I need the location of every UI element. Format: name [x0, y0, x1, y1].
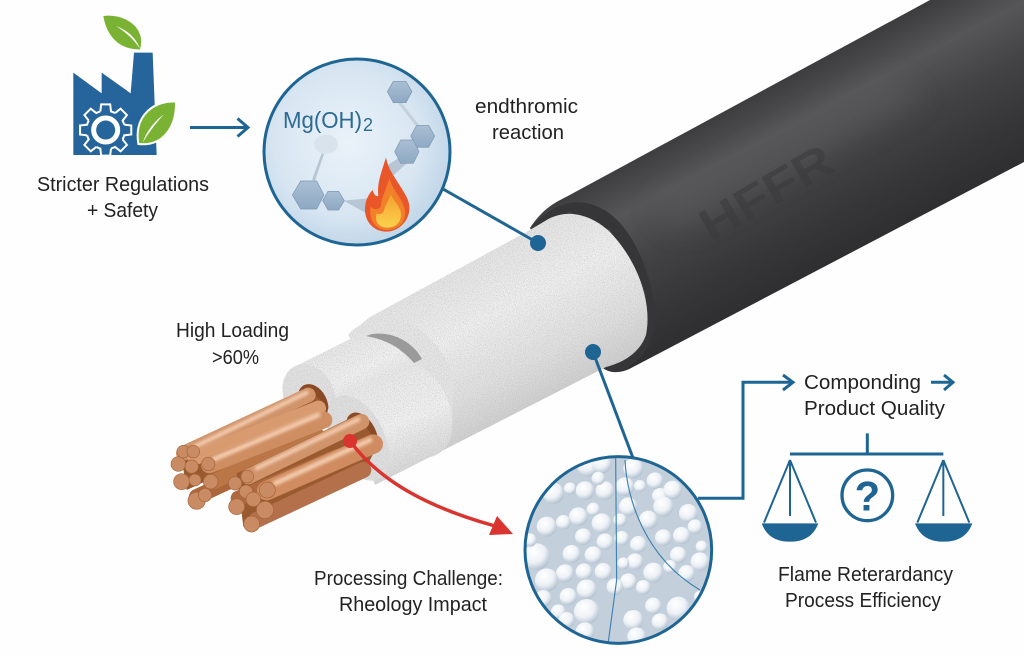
- text: endothermic reaction: endthromic: [475, 96, 578, 118]
- lower strand ends: [228, 470, 275, 532]
- text: high loading: >60%: [212, 347, 259, 369]
- question mark badge: [842, 470, 893, 521]
- icon: top leaf: [103, 16, 141, 49]
- upper insulated core: [272, 334, 422, 435]
- polymer strands: [608, 458, 700, 642]
- lower core hollow: [339, 407, 385, 461]
- upper conductor strands: [171, 388, 325, 509]
- copper conductors: [171, 388, 378, 532]
- text: endothermic reaction: [475, 96, 578, 144]
- formula subscript: 2: [363, 115, 373, 135]
- icon: flame: [365, 157, 409, 232]
- scale beam: [790, 433, 943, 454]
- factory silhouette: [73, 53, 157, 155]
- panel: Mg(OH)2 magnified circle: [264, 59, 450, 245]
- jacket end face: [348, 319, 453, 457]
- molecule hexagons: [292, 81, 435, 210]
- outer black HFFR sheath: [530, 0, 1024, 372]
- embossed HFFR marking: HFFR: [690, 134, 842, 252]
- text: high loading: [176, 320, 289, 369]
- upper core end face: [272, 355, 346, 435]
- upper strand gloss: [193, 393, 318, 459]
- jacket hollow shadow: [366, 334, 422, 363]
- connector: particle circle to compounding: [698, 375, 793, 498]
- cable illustration: [171, 0, 1024, 532]
- text: compounding product quality: [804, 372, 945, 420]
- molecule and flame: [292, 81, 435, 232]
- text: stricter regulations: Stricter Regulations: [37, 174, 209, 196]
- text: compounding product quality: Componding: [804, 372, 921, 394]
- text: stricter regulations: + Safety: [87, 200, 158, 222]
- panel: filler particle micrograph: [523, 453, 712, 646]
- left scale pan: [762, 460, 818, 542]
- lower conductor strands: [228, 415, 378, 532]
- sheath highlight: [650, 75, 925, 235]
- text: flame retardancy process efficiency: Flame Reterardancy: [778, 564, 953, 586]
- leader: chemistry circle to jacket: [443, 189, 546, 251]
- text: processing challenge: Rheology Impact: [339, 594, 487, 616]
- text: flame retardancy process efficiency: Process Efficiency: [785, 590, 941, 612]
- upper core hollow: [291, 379, 335, 427]
- sheath inner rim: [530, 202, 655, 372]
- icon: side leaf: [138, 102, 176, 144]
- icon: factory with leaves: [73, 16, 176, 156]
- lower strand gloss: [257, 419, 370, 483]
- question mark badge: ?: [855, 473, 880, 520]
- text: processing challenge: Processing Challenge:: [314, 568, 503, 590]
- upper strand ends: [171, 445, 218, 509]
- text: stricter regulations: [37, 174, 209, 222]
- icon: gear: [80, 104, 131, 156]
- text: high loading: High Loading: [176, 320, 289, 342]
- lower insulated core: [314, 363, 452, 491]
- arrow: regulations to chemistry: [190, 118, 248, 136]
- white inner jacket: [348, 214, 648, 457]
- filler particles: [523, 453, 709, 646]
- arrow: conductor to particle circle: [343, 434, 513, 535]
- molecule blob: [314, 135, 338, 154]
- arrow: after compounding: [931, 375, 953, 390]
- molecule bonds: [312, 102, 421, 213]
- chemical formula: Mg(OH): [283, 107, 362, 133]
- icon: balance scale with question mark: [762, 433, 972, 542]
- right scale pan: [915, 460, 972, 542]
- text: endothermic reaction: reaction: [492, 122, 564, 144]
- lower core end face: [314, 385, 402, 491]
- leader: jacket to particle circle: [585, 344, 633, 458]
- text: processing challenge: [314, 568, 503, 616]
- text: compounding product quality: Product Quality: [804, 398, 945, 420]
- text: flame retardancy process efficiency: [778, 564, 953, 612]
